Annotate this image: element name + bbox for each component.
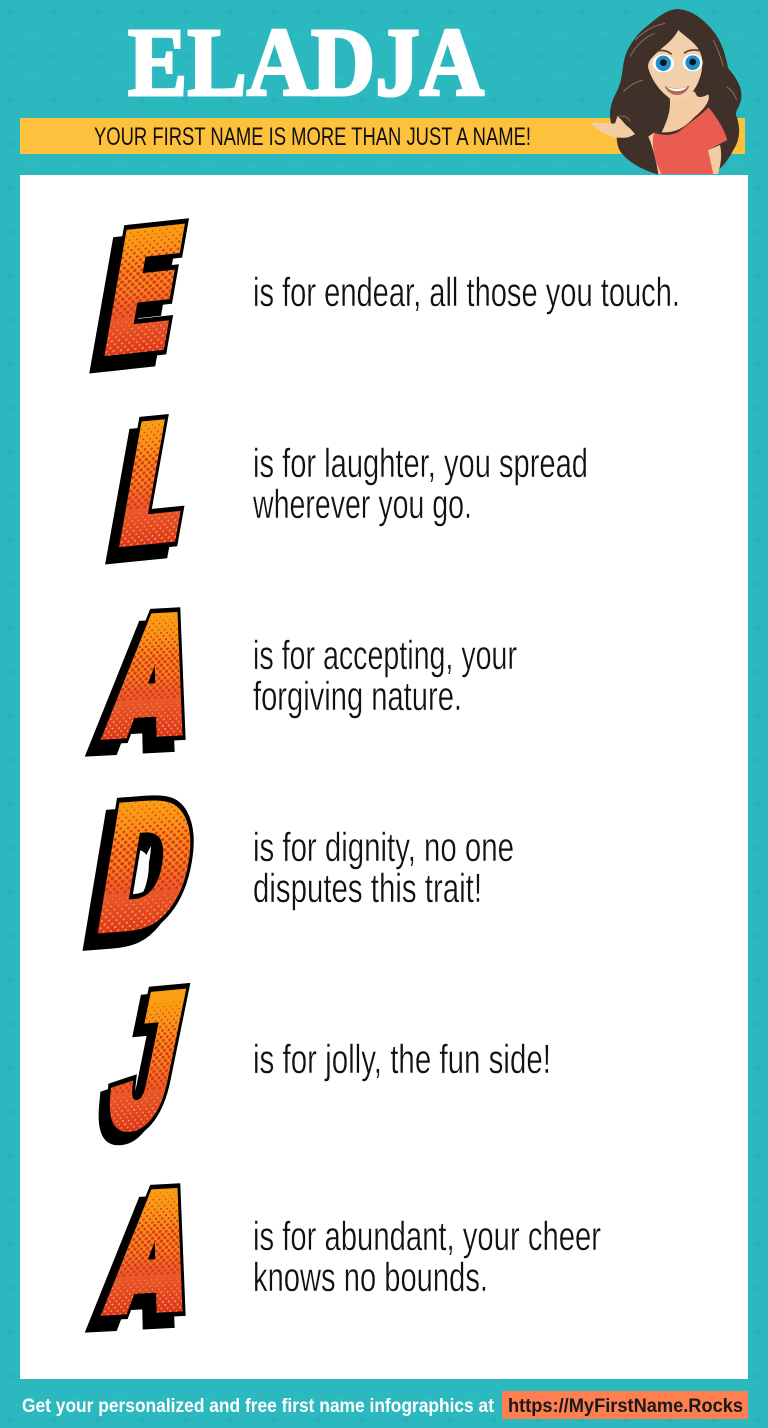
icon: comic letter D: D <box>84 767 207 970</box>
icon: comic letter E: E <box>90 194 197 394</box>
icon: comic letter D: D <box>73 779 196 982</box>
icon: comic letter J: J <box>89 961 190 1175</box>
text: D lines <box>253 824 514 911</box>
panel: letter A row <box>89 588 517 782</box>
footer call to action: Get your personalized and free first name infographics at <box>22 1396 495 1417</box>
icon: comic letter J: J <box>97 953 198 1167</box>
icon: comic letter E: E <box>90 194 197 394</box>
icon: comic letter J: J <box>97 953 198 1167</box>
text: second A lines <box>253 1213 601 1300</box>
text: second A lines: knows no bounds. <box>253 1254 488 1300</box>
panel: letter D row <box>73 767 514 982</box>
icon: comic letter A: A <box>89 600 193 782</box>
icon: comic letter A: A <box>89 1176 193 1358</box>
icon: comic letter D: D <box>84 767 207 970</box>
icon: comic letter E: E <box>79 206 186 406</box>
text: L lines: is for laughter, you spread <box>253 440 588 486</box>
icon: comic letter L: L <box>96 401 193 595</box>
text: A lines: is for accepting, your <box>253 632 517 678</box>
icon: comic letter A: A <box>100 1164 204 1346</box>
icon: comic letter A: A <box>100 588 204 770</box>
text: second A lines: is for abundant, your cheer <box>253 1213 601 1259</box>
white content panel <box>20 175 748 1379</box>
text: J line: is for jolly, the fun side! <box>253 1036 551 1082</box>
panel: letter E row <box>79 194 680 406</box>
text: D lines: is for dignity, no one <box>253 824 514 870</box>
icon: comic letter A: A <box>100 588 204 770</box>
icon: comic letter A: A <box>100 1164 204 1346</box>
icon: comic letter A: A <box>100 588 204 770</box>
text: L lines <box>252 440 588 527</box>
panel: letter J row <box>89 953 551 1175</box>
panel: second letter A row <box>89 1164 601 1358</box>
icon: comic letter L: L <box>106 389 203 583</box>
icon: comic letter L: L <box>106 389 203 583</box>
text: A lines <box>253 632 517 719</box>
text: A lines: forgiving nature. <box>253 673 462 719</box>
subtitle banner: YOUR FIRST NAME IS MORE THAN JUST A NAME! <box>94 123 531 151</box>
icon: comic letter A: A <box>100 1164 204 1346</box>
icon: cartoon woman <box>590 9 741 174</box>
icon: comic letter J: J <box>97 953 198 1167</box>
icon: comic letter L: L <box>106 389 203 583</box>
icon: comic letter D: D <box>84 767 207 970</box>
text: D lines: disputes this trait! <box>253 865 482 911</box>
panel: letter L row <box>96 389 588 595</box>
title: ELADJA <box>128 9 484 117</box>
text: L lines: wherever you go. <box>252 481 472 527</box>
footer <box>22 1391 748 1419</box>
subtitle banner <box>20 118 745 154</box>
icon: comic letter E: E <box>90 194 197 394</box>
footer url badge: https://MyFirstName.Rocks <box>508 1396 743 1417</box>
